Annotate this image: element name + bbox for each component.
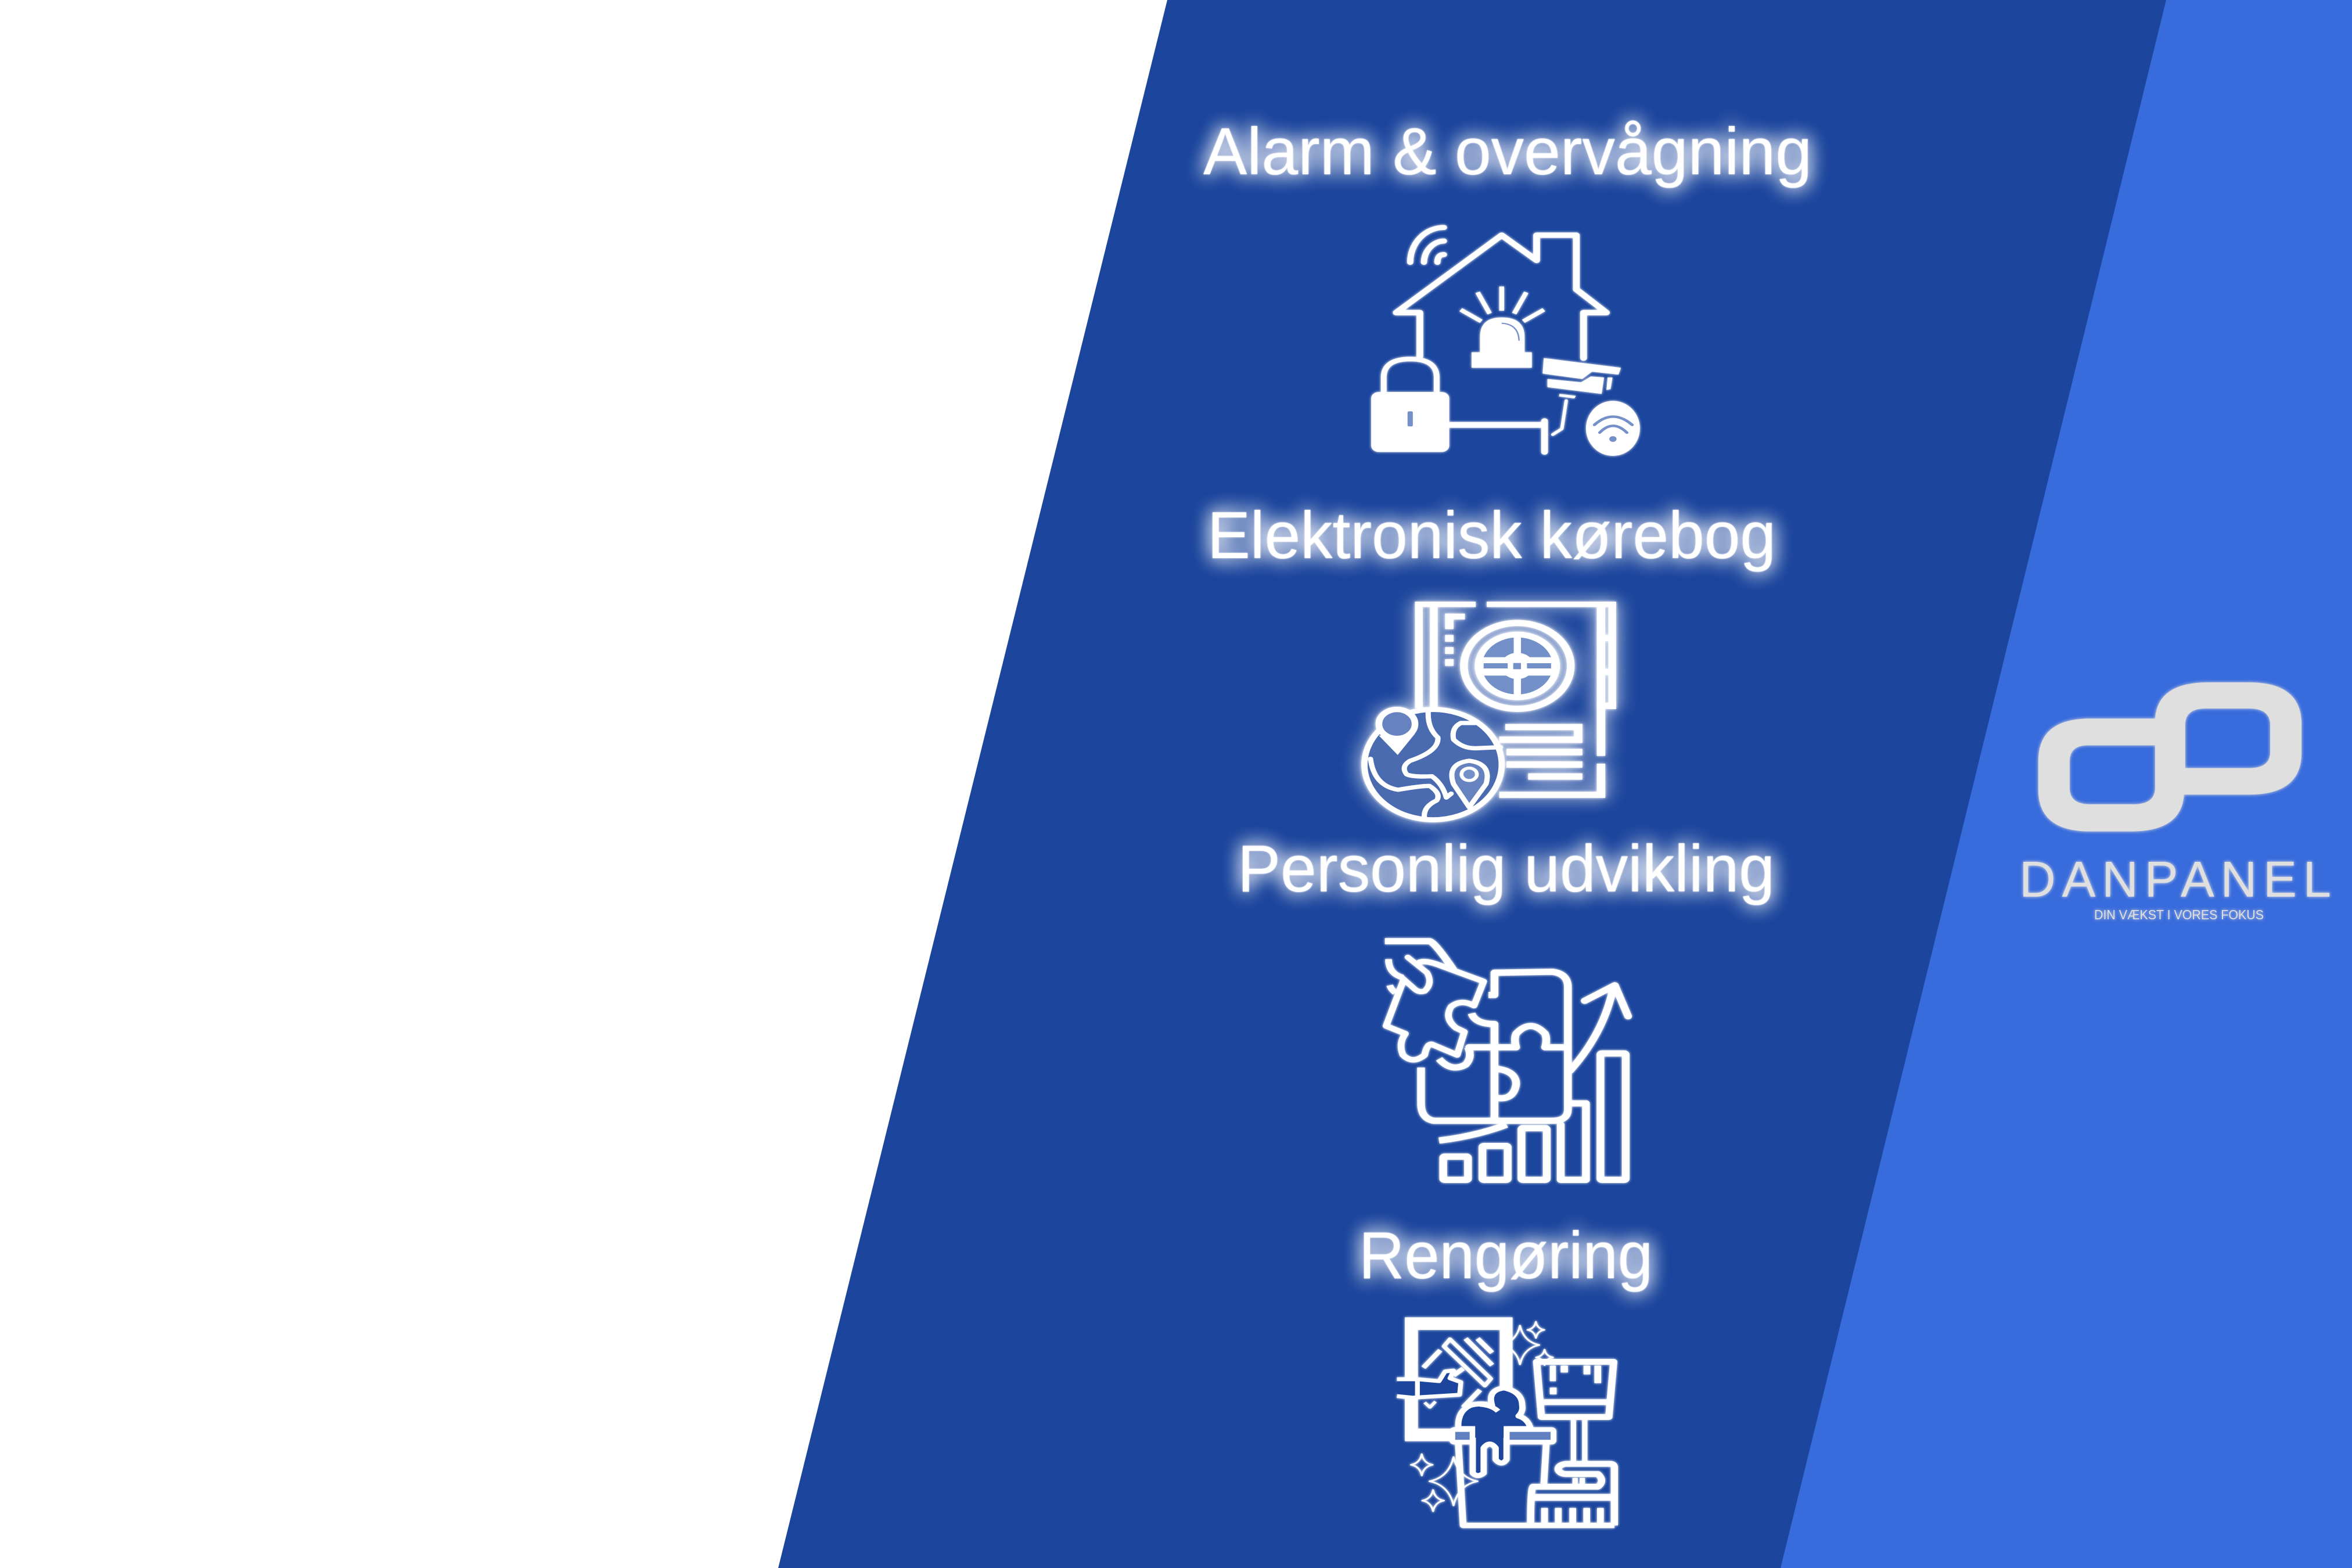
logo wordmark: DANPANEL xyxy=(2019,851,2331,908)
logo tagline: DIN VÆKST I VORES FOKUS xyxy=(2094,907,2264,922)
icon: puzzle and growth chart xyxy=(1385,941,1628,1180)
icon: logbook with globe xyxy=(1365,602,1616,820)
icon: alarm house xyxy=(1371,228,1640,456)
heading: Personlig udvikling: Personlig udvikling xyxy=(1238,832,1775,906)
heading: Rengøring: Rengøring xyxy=(1359,1219,1653,1293)
logo mark: linked rings xyxy=(2038,682,2301,832)
panel: dark blue slanted band xyxy=(778,0,2166,1568)
heading: Elektronisk kørebog: Elektronisk kørebog xyxy=(1207,499,1776,573)
icon: cleaning supplies xyxy=(1397,1317,1614,1526)
panel: light blue background xyxy=(1765,0,2352,1568)
logo: Danpanel xyxy=(2019,682,2331,922)
heading: Alarm & overvågning: Alarm & overvågning xyxy=(1203,115,1812,189)
